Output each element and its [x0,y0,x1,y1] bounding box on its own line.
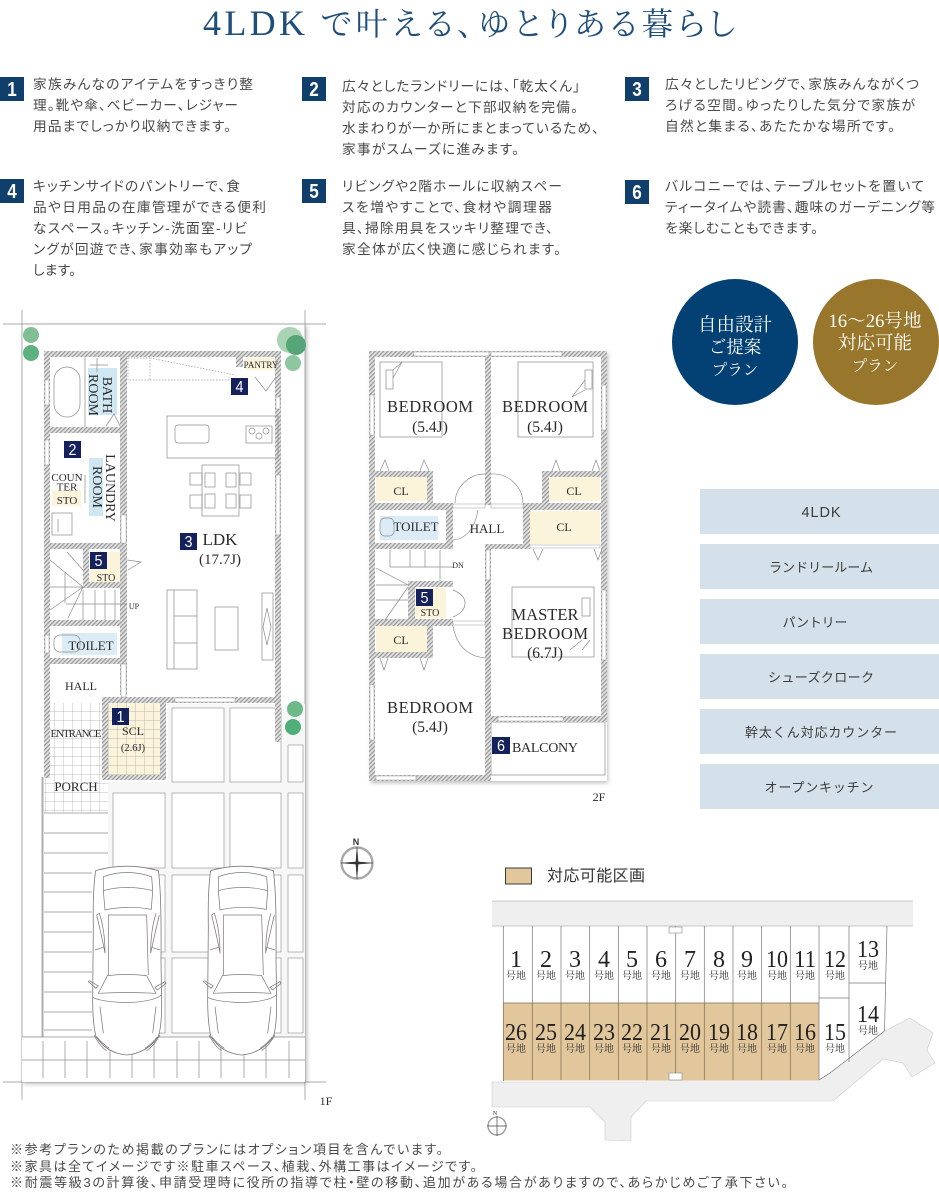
entrance steps [43,777,108,1037]
room labels 1F: (17.7J) [199,552,241,568]
room labels 1F: ROOM [89,466,104,509]
feature 2: 家事がスムーズに進みます。 [342,141,519,157]
room labels 2F: CL [393,484,409,498]
title: で叶える、ゆとりある暮らし [321,6,735,42]
lot numbers: 24 [564,1020,586,1046]
car 2 [203,866,281,1055]
room labels 2F: BEDROOM [387,698,473,717]
title: 4LDK [203,3,305,43]
lot numbers: 21 [650,1020,672,1046]
room labels 1F: (2.6J) [121,743,146,754]
room labels 1F: LAUNDRY [102,454,117,522]
floors and tiles [44,358,277,812]
footnotes: ※耐震等級3の計算後、申請受理時に役所の指導で柱・壁の移動、追加がある場合がありますので、あらかじめご了承下さい。 [10,1175,788,1190]
plan numbers 1F: 3 [184,534,193,551]
lot numbers: 号地 [651,967,671,982]
feature list: 幹太くん対応カウンター [745,725,897,740]
lot numbers: 19 [708,1020,730,1046]
feature 2: 水まわりが一か所にまとまっているため、 [342,121,599,136]
legend [506,867,645,885]
lot numbers: 5 [626,947,638,973]
lot numbers: 22 [621,1020,643,1046]
plan numbers 2F: 5 [420,590,429,607]
lot map [487,901,935,1141]
room labels 2F: (5.4J) [527,419,563,436]
badge: lots 16-26 plan: プラン [852,357,898,375]
room labels 2F: (6.7J) [527,645,563,662]
room labels 2F: CL [393,633,409,647]
room labels 1F: PANTRY [244,360,279,370]
lot numbers: 12 [824,947,846,973]
feature list [700,489,939,809]
room labels 2F: (5.4J) [412,719,448,736]
lot numbers: 15 [824,1020,846,1046]
lot numbers: 10 [766,947,788,973]
feature list: シューズクローク [768,670,874,685]
lot numbers: 号地 [594,1040,614,1055]
feature 5: スを増やすことで、食材や調理器 [342,200,552,215]
lot numbers: 13 [857,937,879,963]
lot numbers: 号地 [565,967,585,982]
walls 2F [369,351,607,781]
feature 3: ろげる空間。ゆったりした気分で家族が [665,97,916,113]
lot numbers: 号地 [506,1040,526,1055]
lot numbers: 7 [684,947,696,973]
feature 5: リビングや2階ホールに収納スペー [342,179,562,194]
lot numbers: 3 [569,947,581,973]
lot numbers: 号地 [737,967,757,982]
room labels 1F: SCL [122,724,144,738]
feature 2: 2 [309,79,319,101]
room labels 2F: DN [452,561,464,570]
closets and wet areas [376,477,605,775]
footnotes: ※参考プランのため掲載のプランにはオプション項目を含んでいます。 [10,1142,443,1157]
badge: lots 16-26 plan: 16〜26号地 [828,311,922,332]
plan numbers 1F: 5 [94,553,103,570]
feature 3: 広々としたリビングで、家族みんながくつ [665,76,919,92]
feature 6: を楽しむこともできます。 [665,221,818,236]
floor plan 1F [3,310,333,1108]
lot numbers: 17 [766,1020,788,1046]
compass: N [353,837,359,847]
room labels 1F: COUN [51,472,83,484]
lot numbers: 号地 [536,967,556,982]
feature 6 [625,178,935,236]
lot numbers: 14 [857,1002,879,1028]
room labels 2F: CL [566,484,582,498]
lot numbers: 4 [598,947,610,973]
feature 4: 4 [7,181,17,203]
room labels 2F [387,397,606,804]
room labels 2F: BEDROOM [502,397,588,416]
feature 4: ングが回遊でき、家事効率もアップ [33,241,253,257]
lot numbers: 20 [679,1020,701,1046]
feature 3: 3 [632,79,642,101]
plan numbers 1F [64,378,248,726]
plan numbers 1F: 1 [116,709,125,726]
floor plan 2F [369,351,608,804]
room labels 2F: STO [421,608,439,619]
lot numbers: 号地 [795,967,815,982]
lot numbers: 25 [535,1020,557,1046]
feature 6: バルコニーでは、テーブルセットを置いて [665,178,924,194]
compass [341,837,373,879]
feature 1 [0,76,253,134]
feature 6: 6 [632,182,642,204]
plan numbers 1F: 2 [68,442,77,459]
feature 4: なスペース。キッチン-洗面室-リビ [33,221,247,236]
feature 5: 5 [309,181,319,203]
walls 1F [44,351,281,780]
lot numbers: 16 [794,1020,816,1046]
feature list: パントリー [782,615,848,630]
lot numbers: 号地 [858,1022,878,1037]
room labels 1F: STO [97,573,115,584]
room labels 1F: ENTRANCE [50,728,102,740]
room labels 1F: ROOM [85,374,100,417]
feature 2 [302,77,599,157]
feature 2: 対応のカウンターと下部収納を完備。 [342,100,578,115]
footnotes [10,1142,788,1190]
lot numbers: 号地 [622,1040,642,1055]
feature 5: 家全体が広く快適に感じられます。 [342,241,561,257]
feature 1: 理。靴や傘、ベビーカー、レジャー [33,98,238,113]
feature 5: 具、掃除用具をスッキリ整理でき、 [342,220,553,236]
feature 1: 1 [7,79,17,101]
furniture and doors 2F [376,362,602,670]
room labels 1F [50,360,333,1108]
lot numbers: 号地 [594,967,614,982]
lot boundaries [503,926,887,1080]
plan numbers 1F: 4 [236,379,244,396]
lot numbers: 号地 [680,1040,700,1055]
room labels 1F: PORCH [54,779,98,794]
feature 1: 家族みんなのアイテムをすっきり整 [33,76,253,92]
badge: free design plan: 自由設計 [698,315,772,336]
available lots 16-26 [503,1003,819,1081]
lot numbers [505,937,879,1055]
lot numbers: 23 [593,1020,615,1046]
paving panels [108,704,305,1038]
lot numbers: 6 [655,947,667,973]
lot numbers: 1 [510,947,522,973]
plan numbers 2F: 6 [497,738,505,755]
lot numbers: 号地 [680,967,700,982]
map compass: N [493,1111,498,1117]
fixtures and furniture 1F [50,357,278,669]
lot numbers: 2 [540,947,552,973]
legend: 対応可能区画 [547,867,645,885]
car 1 [88,866,166,1055]
badge: lots 16-26 plan: 対応可能 [838,333,912,354]
feature 4: します。 [33,263,76,278]
feature 4 [0,179,266,278]
lot numbers: 26 [505,1020,527,1046]
feature 3: 自然と集まる、あたたかな場所です。 [665,118,895,134]
plan numbers 2F [416,589,510,755]
room labels 2F: TOILET [393,519,439,534]
lot numbers: 8 [713,947,725,973]
feature 2: 広々としたランドリーには、「乾太くん」 [342,79,580,94]
lot numbers: 号地 [651,1040,671,1055]
room labels 1F: UP [129,602,140,611]
room labels 1F: BATH [99,377,114,413]
lot numbers: 9 [741,947,753,973]
badge: free design plan [672,279,798,405]
room labels 1F: LDK [203,530,238,549]
room labels 1F: HALL [65,679,97,693]
lot numbers: 号地 [709,967,729,982]
lot numbers: 号地 [709,1040,729,1055]
room labels 1F: TER [57,482,78,494]
feature 4: キッチンサイドのパントリーで、食 [33,179,240,194]
lot numbers: 号地 [565,1040,585,1055]
lot numbers: 号地 [825,967,845,982]
lot numbers: 号地 [767,967,787,982]
room labels 2F: BALCONY [512,741,578,756]
room labels 1F: TOILET [68,638,114,653]
lot numbers: 号地 [767,1040,787,1055]
room labels 2F: HALL [470,521,504,536]
feature 1: 用品までしっかり収納できます。 [33,119,231,134]
lot numbers: 号地 [506,967,526,982]
lot numbers: 号地 [622,967,642,982]
lot numbers: 号地 [795,1040,815,1055]
badge: free design plan: プラン [712,361,758,379]
feature list: ランドリールーム [769,560,873,575]
lot numbers: 11 [794,947,816,973]
front paving [22,1037,305,1082]
lot numbers: 18 [736,1020,758,1046]
room labels 1F: 1F [320,1094,333,1108]
room labels 1F: STO [57,495,77,507]
roads [492,901,935,1141]
lot numbers: 号地 [536,1040,556,1055]
map compass [487,1111,507,1136]
badge: lots 16-26 plan [813,279,939,405]
badge: free design plan: ご提案 [709,337,761,357]
room labels 2F: CL [556,520,572,534]
trees [23,327,306,735]
feature 4: 品や日用品の在庫管理ができる便利 [33,200,266,215]
lot numbers: 号地 [825,1040,845,1055]
lot numbers: 号地 [737,1040,757,1055]
feature list: オープンキッチン [764,780,874,795]
room labels 2F: 2F [593,790,606,804]
feature list: 4LDK [802,505,841,521]
feature 5 [302,179,562,257]
room labels 2F: MASTER [512,605,578,624]
room labels 2F: BEDROOM [387,397,473,416]
feature 6: ティータイムや読書、趣味のガーデニング等 [665,199,935,215]
feature 3 [625,76,919,134]
room labels 2F: BEDROOM [502,624,588,643]
lot numbers: 号地 [858,957,878,972]
room labels 2F: (5.4J) [412,419,448,436]
footnotes: ※家具は全てイメージです※駐車スペース、植栽、外構工事はイメージです。 [10,1159,477,1174]
